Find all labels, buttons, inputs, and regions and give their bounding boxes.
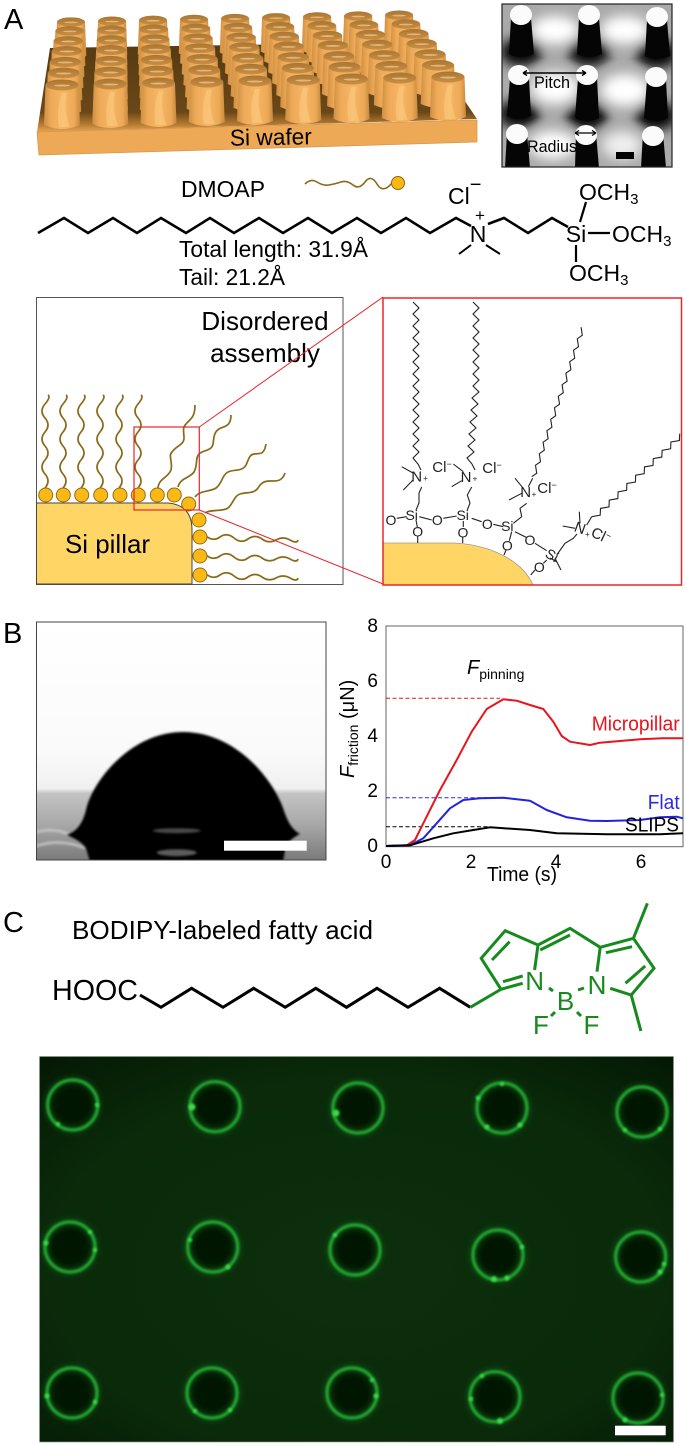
- y axis title: friction: [345, 725, 361, 766]
- y axis ticks: 4: [367, 726, 378, 747]
- molecular atom labels: N: [461, 469, 471, 486]
- molecular atom labels: +: [423, 474, 428, 483]
- molecular atom labels: N: [572, 519, 588, 538]
- molecular atom labels: Si: [405, 507, 418, 523]
- molecular atom labels: O: [386, 512, 397, 528]
- panel: disordered assembly schematic: assembly: [210, 338, 320, 368]
- molecular atom labels: [386, 459, 613, 575]
- x axis title: Time (s): [487, 864, 557, 886]
- plot frame: [386, 626, 683, 847]
- silicon group: 3: [620, 272, 628, 289]
- molecular atom labels: O: [502, 538, 513, 554]
- Si surface: [383, 543, 533, 585]
- fluorescent rings: [45, 1080, 667, 1423]
- F pinning label: F: [467, 657, 481, 679]
- propyl linker: [488, 218, 568, 233]
- BODIPY title: BODIPY-labeled fatty acid: [72, 915, 373, 945]
- wafer label: Si wafer: [230, 123, 312, 151]
- alkyl chain: [38, 218, 471, 233]
- scale bar: [616, 152, 634, 159]
- molecular atom labels: −: [446, 459, 452, 469]
- silicon group: Si: [566, 221, 586, 247]
- silicon group: 3: [630, 191, 638, 208]
- series: micropillar: [386, 699, 683, 846]
- droplet reflections: [153, 828, 201, 833]
- x axis ticks: 6: [636, 852, 646, 873]
- tail length text: Tail: 21.2Å: [179, 263, 286, 290]
- molecular atom labels: +: [473, 475, 478, 484]
- BODIPY fluorophore: N: [588, 970, 606, 1000]
- molecular atom labels: O: [525, 532, 536, 548]
- series: SLIPS: [386, 827, 683, 846]
- molecular bonds: [397, 302, 680, 575]
- chloride counterion: Cl: [448, 183, 470, 209]
- molecule tails: [42, 395, 298, 580]
- molecular atom labels: O: [458, 524, 469, 540]
- scale bar: [615, 1426, 666, 1435]
- panel label C: C: [3, 907, 24, 939]
- y axis ticks: 6: [367, 671, 378, 692]
- total length text: Total length: 31.9Å: [179, 235, 369, 262]
- zoom connector lines: [199, 297, 383, 584]
- molecular atom labels: N: [520, 484, 531, 501]
- friction force line chart: [337, 616, 683, 886]
- wafer front face: [37, 120, 477, 155]
- y axis ticks: [367, 616, 378, 857]
- droplet silhouette: [67, 732, 300, 862]
- silicon group: OCH: [569, 260, 620, 286]
- molecular atom labels: −: [604, 530, 613, 541]
- BODIPY fluorophore: F: [583, 1010, 599, 1040]
- y axis title: (μN): [337, 680, 359, 725]
- molecular atom labels: Si: [543, 545, 562, 565]
- panel: molecular detail view: [383, 298, 682, 585]
- heading: disordered assembly: Disordered: [201, 306, 329, 336]
- x axis ticks: 4: [551, 852, 562, 873]
- pitch label: Pitch: [534, 73, 570, 92]
- y axis ticks: 0: [367, 836, 378, 857]
- silicon group: OCH: [612, 221, 663, 247]
- molecular atom labels: N: [411, 468, 422, 486]
- BODIPY fluorophore: B: [557, 986, 574, 1016]
- droplet photograph: [36, 622, 326, 862]
- x axis ticks: 0: [381, 852, 391, 873]
- molecular atom labels: O: [534, 559, 545, 575]
- BODIPY fluorophore: [470, 903, 654, 1040]
- radius label: Radius: [527, 137, 577, 156]
- silicon group: [566, 179, 671, 289]
- molecular atom labels: Cl: [588, 524, 608, 545]
- y axis title: F: [337, 764, 359, 778]
- molecular atom labels: +: [532, 490, 537, 499]
- silicon group: OCH: [579, 179, 630, 205]
- DMOAP chemical structure: [38, 174, 671, 289]
- fatty acid chain: [140, 988, 470, 1007]
- panel: disordered assembly schematic: [36, 298, 343, 584]
- molecule head groups: [39, 488, 207, 582]
- fluorescence micrograph: [40, 1056, 674, 1442]
- panel label A: A: [4, 4, 24, 36]
- pitch arrow: [523, 70, 586, 76]
- molecular atom labels: Si: [456, 507, 469, 523]
- BODIPY fluorophore: F: [533, 1010, 549, 1040]
- x axis ticks: 2: [466, 852, 476, 873]
- molecular atom labels: O: [412, 524, 423, 540]
- molecular atom labels: O: [482, 516, 493, 532]
- series label: SLIPS: SLIPS: [625, 815, 679, 837]
- y axis ticks: 8: [367, 616, 378, 637]
- molecular atom labels: +: [585, 530, 590, 539]
- SEM image of pillars: [498, 4, 678, 168]
- series: flat: [386, 798, 683, 846]
- BODIPY fatty acid structure: [52, 903, 654, 1040]
- molecular atom labels: O: [432, 512, 443, 528]
- F pinning label: pinning: [479, 666, 524, 682]
- nitrogen group: [459, 206, 500, 254]
- chloride counterion: −: [470, 174, 481, 196]
- wafer top surface: [37, 42, 477, 132]
- zoom box: [134, 427, 199, 510]
- series label: micropillar: Micropillar: [592, 714, 680, 736]
- molecular atom labels: −: [496, 460, 502, 470]
- 3D micropillar wafer illustration: [37, 11, 477, 155]
- icon: DMOAP molecule schematic: [305, 176, 404, 190]
- scale bar: [224, 841, 307, 851]
- bright spots on rings: [44, 1082, 666, 1424]
- dashed pinning levels: [386, 698, 500, 827]
- Si pillar block: [36, 503, 192, 584]
- BODIPY fluorophore: N: [525, 966, 544, 996]
- silicon group: 3: [663, 233, 671, 250]
- Si pillar label: Si pillar: [65, 529, 150, 559]
- molecular atom labels: −: [551, 480, 557, 490]
- series label: flat: Flat: [648, 792, 680, 814]
- nitrogen group: N: [470, 221, 486, 247]
- radius arrow: [575, 130, 596, 136]
- molecular atom labels: Cl: [537, 480, 551, 497]
- x axis ticks: [381, 852, 646, 873]
- nitrogen group: +: [475, 206, 485, 225]
- y axis ticks: 2: [367, 781, 378, 802]
- pillar rows: [44, 11, 466, 129]
- HOOC label: HOOC: [52, 975, 138, 1007]
- panel label B: B: [3, 618, 22, 650]
- molecular atom labels: Cl: [432, 459, 446, 476]
- molecular atom labels: Si: [501, 518, 514, 534]
- molecular atom labels: Cl: [482, 460, 496, 477]
- DMOAP label: DMOAP: [181, 176, 265, 202]
